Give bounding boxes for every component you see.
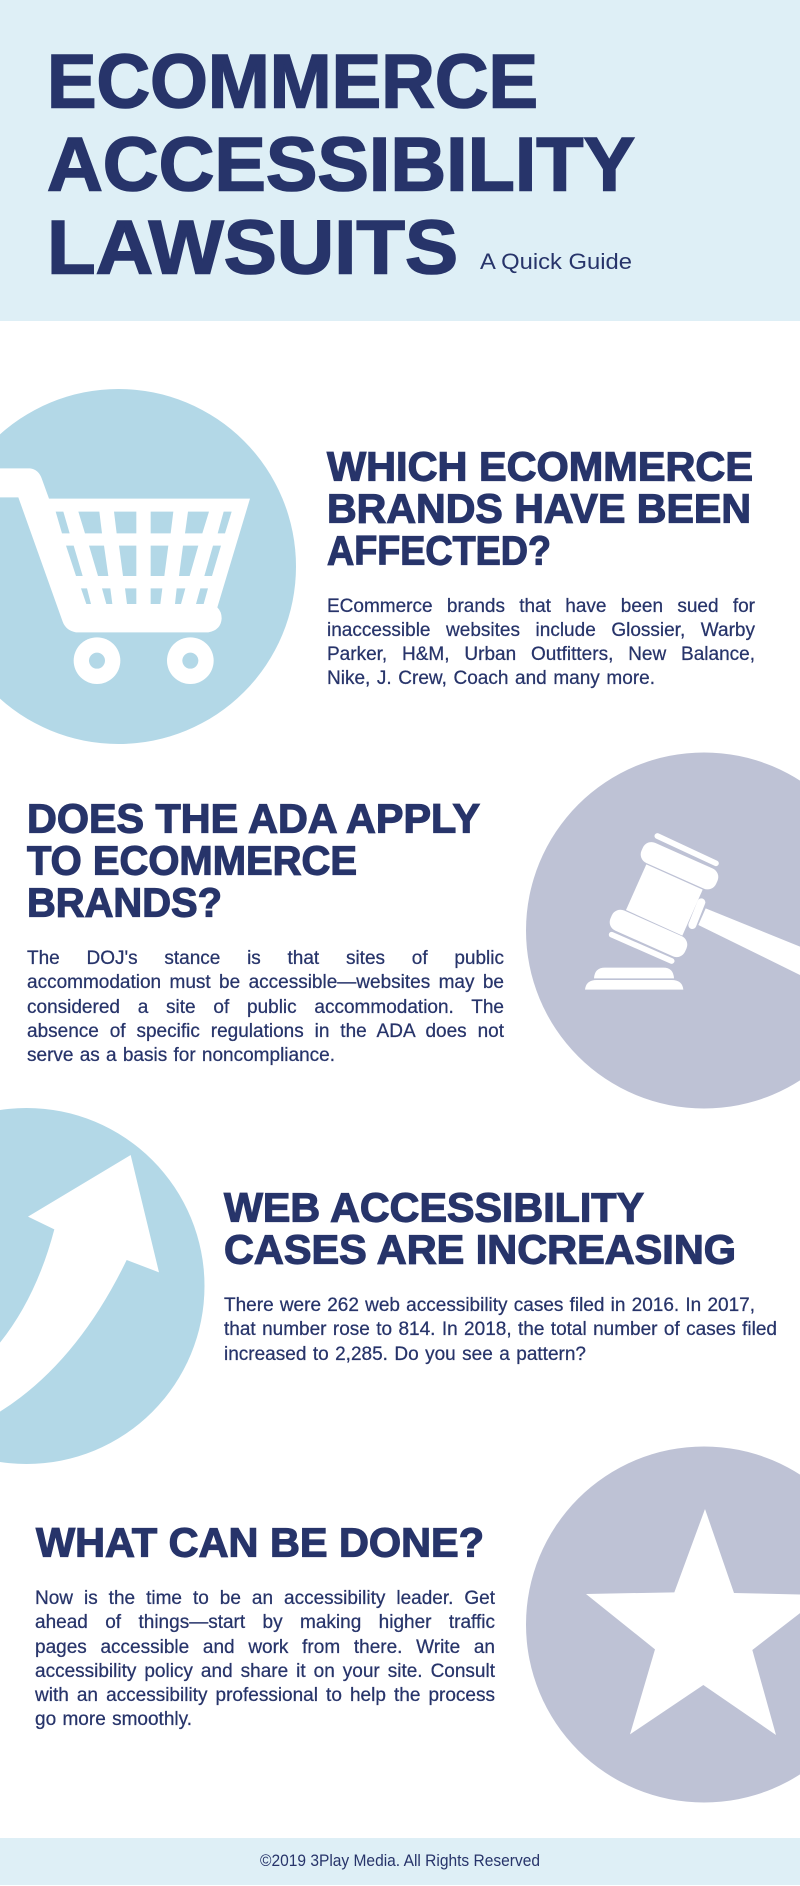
body text <box>327 596 756 689</box>
title: ECOMMERCE <box>47 40 538 124</box>
body text: go more smoothly. <box>35 1709 192 1730</box>
body text: There were 262 web accessibility cases filed in 2016. In 2017, <box>224 1295 755 1316</box>
heading <box>327 444 753 574</box>
heading: AFFECTED? <box>327 528 551 574</box>
body text <box>27 948 504 1066</box>
heading: CASES ARE INCREASING <box>224 1226 736 1272</box>
copyright text: ©2019 3Play Media. All Rights Reserved <box>260 1852 540 1870</box>
body text: Nike, J. Crew, Coach and many more. <box>327 668 655 689</box>
body text: accommodation must be accessible—websites may be <box>27 972 504 993</box>
title: ACCESSIBILITY <box>47 122 635 208</box>
body text: pages accessible and work from there. Write an <box>35 1637 495 1658</box>
body text: serve as a basis for noncompliance. <box>27 1045 335 1066</box>
body text: increased to 2,285. Do you see a pattern? <box>224 1344 586 1365</box>
heading: BRANDS? <box>27 880 222 926</box>
body text: ahead of things—start by making higher traffic <box>35 1612 495 1633</box>
icon: star in circle <box>526 1446 800 1802</box>
heading: WEB ACCESSIBILITY <box>224 1184 644 1230</box>
body text: inaccessible websites include Glossier, Warby <box>327 620 755 641</box>
heading <box>224 1184 736 1272</box>
heading: TO ECOMMERCE <box>27 838 357 884</box>
heading: WHICH ECOMMERCE <box>327 444 753 490</box>
body text: ECommerce brands that have been sued for <box>327 596 755 617</box>
panel: does the ADA apply <box>26 752 800 1108</box>
panel: what can be done <box>34 1446 800 1802</box>
body text: accessibility policy and share it on your site. Consult <box>35 1661 495 1682</box>
body text <box>224 1295 777 1365</box>
icon: shopping cart in circle <box>0 389 296 744</box>
body text: with an accessibility professional to help the process <box>35 1685 495 1706</box>
subtitle: A Quick Guide <box>480 249 632 274</box>
header banner <box>0 0 800 321</box>
body text: absence of specific regulations in the ADA does not <box>27 1021 504 1042</box>
body text: considered a site of public accommodation. The <box>27 997 504 1018</box>
panel: affected brands <box>0 389 756 744</box>
panel: cases are increasing <box>0 1108 777 1464</box>
heading: DOES THE ADA APPLY <box>27 796 480 842</box>
heading: BRANDS HAVE BEEN <box>327 486 751 532</box>
body text: The DOJ's stance is that sites of public <box>27 948 504 969</box>
body text: Parker, H&M, Urban Outfitters, New Balance, <box>327 644 755 665</box>
title: LAWSUITS <box>47 206 458 290</box>
footer bar <box>0 1838 800 1885</box>
title <box>47 40 635 290</box>
heading: WHAT CAN BE DONE? <box>36 1520 484 1566</box>
body text <box>34 1588 495 1730</box>
icon: gavel in circle <box>526 752 800 1108</box>
heading <box>27 796 480 926</box>
icon: rising arrow in circle <box>0 1108 204 1464</box>
body text: Now is the time to be an accessibility leader. Get <box>35 1588 495 1609</box>
body text: that number rose to 814. In 2018, the total number of cases filed <box>224 1319 777 1340</box>
